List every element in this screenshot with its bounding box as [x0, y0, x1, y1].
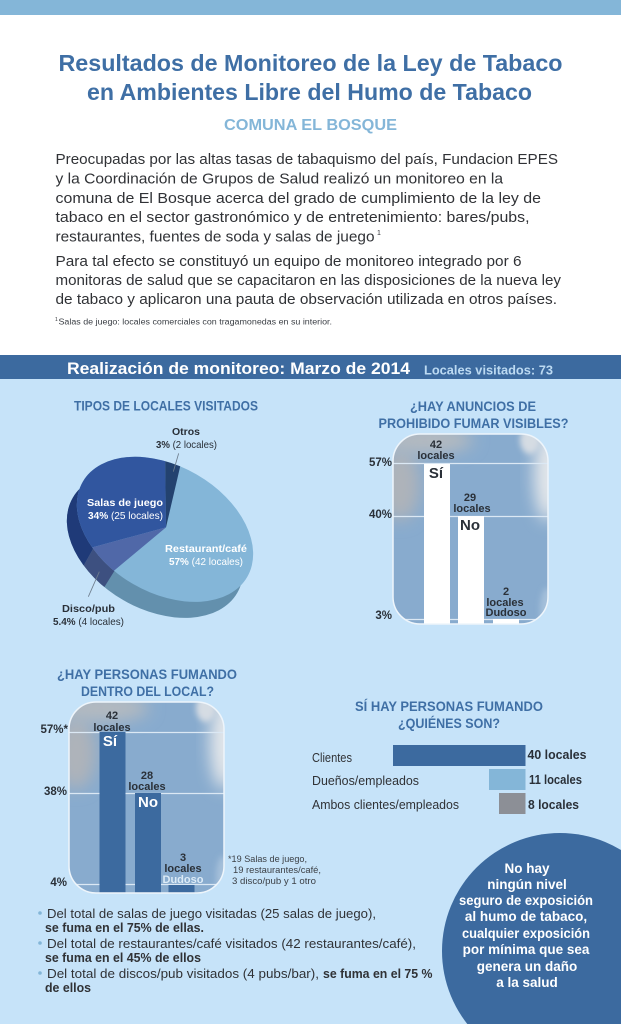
bar labels: 3	[180, 852, 186, 864]
callout circle: cualquier exposición	[462, 926, 590, 941]
panel: light blue background	[0, 355, 621, 1024]
bar chart: quienes son: Dueños/empleados	[312, 773, 419, 788]
bar labels: Dudoso	[163, 874, 204, 886]
title	[58, 50, 562, 105]
bar labels: 29	[464, 492, 476, 504]
intro text: monitoras de salud que se capacitaron en las disposiciones de la nueva ley	[56, 273, 562, 289]
bar labels: locales	[417, 450, 455, 462]
heading: anuncios	[378, 399, 568, 431]
callout circle: No hay	[504, 861, 550, 876]
intro text: 1	[377, 230, 381, 237]
bar labels	[93, 710, 204, 886]
bar chart: quienes son: 8 locales	[528, 798, 579, 812]
bar chart: quienes son: 40 locales	[528, 748, 587, 762]
label: salas de juego	[87, 497, 163, 522]
callout circle: a la salud	[496, 975, 558, 990]
intro text: restaurantes, fuentes de soda y salas de juego	[56, 230, 374, 246]
bar labels: locales	[164, 863, 202, 875]
heading: tipos de locales: TIPOS DE LOCALES VISITADOS	[74, 398, 258, 414]
banner: Realización de monitoreo: Marzo de 2014	[67, 359, 411, 378]
bullet list: de ellos	[45, 980, 91, 995]
axis labels	[369, 457, 392, 622]
heading: personas fumando: DENTRO DEL LOCAL?	[81, 684, 214, 699]
bullet list: Del total de restaurantes/café visitados (42 restaurantes/café),	[47, 936, 416, 951]
title: en Ambientes Libre del Humo de Tabaco	[87, 79, 532, 105]
chart footnote: *19 Salas de juego,	[228, 854, 307, 865]
intro text: comuna de El Bosque acerca del grado de cumplimiento de la ley de	[56, 191, 541, 207]
callout circle	[442, 833, 621, 1024]
bar labels: locales	[486, 597, 524, 609]
pie chart: tipos de locales	[53, 428, 254, 627]
chart footnote: 19 restaurantes/café,	[233, 865, 321, 876]
bar chart: quienes son: Ambos clientes/empleados	[312, 797, 459, 812]
axis labels: 38%	[44, 786, 67, 798]
bar labels: Sí	[429, 465, 444, 482]
sky background	[70, 702, 224, 892]
top band	[0, 0, 621, 15]
bullet list: se fuma en el 75% de ellas.	[45, 920, 204, 935]
footnote: Salas de juego: locales comerciales con tragamonedas en su interior.	[58, 318, 332, 326]
bar labels: 42	[106, 710, 118, 722]
chart footnote	[228, 854, 321, 887]
bullet list: se fuma en el 45% de ellos	[45, 950, 201, 965]
axis labels: 57%	[369, 457, 392, 469]
axis labels: 4%	[50, 877, 67, 889]
bar labels	[417, 439, 527, 619]
bar labels: locales	[93, 722, 131, 734]
label: salas de juego: Salas de juego	[87, 497, 163, 509]
bar labels: 28	[141, 770, 153, 782]
bullet list: se fuma en el 75 %	[323, 966, 433, 981]
bar chart: quienes son: Clientes	[312, 750, 352, 765]
bar labels: locales	[453, 503, 491, 515]
heading: quienes son: SÍ HAY PERSONAS FUMANDO	[355, 699, 543, 714]
heading: anuncios: ¿HAY ANUNCIOS DE	[410, 399, 536, 414]
bullet list	[38, 906, 433, 995]
label: disco: 5.4% (4 locales)	[53, 616, 124, 628]
axis labels: 40%	[369, 509, 392, 521]
bullet list: Del total de discos/pub visitados (4 pubs/bar),	[47, 966, 319, 981]
callout circle: genera un daño	[477, 959, 577, 974]
heading: anuncios: PROHIBIDO FUMAR VISIBLES?	[378, 416, 568, 431]
bar labels: 42	[430, 439, 442, 451]
axis labels	[40, 724, 69, 889]
intro text: Preocupadas por las altas tasas de tabaquismo del país, Fundacion EPES	[56, 152, 558, 168]
label: disco: Disco/pub	[62, 603, 115, 615]
label: otros	[156, 426, 217, 451]
label: salas de juego: 34% (25 locales)	[88, 510, 163, 522]
label: otros: Otros	[172, 426, 200, 438]
heading: quienes son	[355, 699, 543, 731]
banner	[0, 355, 621, 379]
sky background	[394, 434, 548, 624]
heading: personas fumando: ¿HAY PERSONAS FUMANDO	[57, 667, 237, 682]
bar labels: Sí	[103, 733, 118, 750]
heading: personas fumando	[57, 667, 237, 699]
bar labels: Dudoso	[486, 607, 527, 619]
intro text	[56, 152, 562, 308]
intro text: de tabaco y aplicaron una pauta de observación utilizada en otros países.	[56, 292, 557, 308]
callout circle: seguro de exposición	[459, 893, 593, 908]
chart footnote: 3 disco/pub y 1 otro	[232, 876, 316, 887]
label: disco	[53, 603, 124, 628]
intro text: Para tal efecto se constituyó un equipo de monitoreo integrado por 6	[56, 254, 522, 270]
label: otros: 3% (2 locales)	[156, 439, 217, 451]
title: Resultados de Monitoreo de la Ley de Tabaco	[58, 50, 562, 76]
bar labels: No	[460, 517, 480, 534]
intro text: y la Coordinación de Grupos de Salud realizó un monitoreo en la	[56, 172, 504, 188]
axis labels: 3%	[375, 610, 392, 622]
intro text: tabaco en el sector gastronómico y de entretenimiento: bares/pubs,	[56, 210, 530, 226]
label: restaurant: Restaurant/café	[165, 543, 247, 555]
heading: quienes son: ¿QUIÉNES SON?	[398, 716, 500, 731]
subtitle: COMUNA EL BOSQUE	[224, 117, 397, 134]
bar labels: 2	[503, 586, 509, 598]
bar labels: No	[138, 794, 158, 811]
label: restaurant: 57% (42 locales)	[169, 556, 243, 568]
bullet list: Del total de salas de juego visitadas (25 salas de juego),	[47, 906, 376, 921]
axis labels: 57%*	[40, 724, 69, 736]
bar chart: quienes son: 11 locales	[529, 773, 582, 787]
label: restaurant	[165, 543, 247, 568]
bar chart: quienes son	[312, 745, 587, 814]
callout circle: ningún nivel	[487, 877, 567, 892]
footnote: 1	[55, 317, 58, 323]
banner: Locales visitados: 73	[424, 364, 553, 378]
bar chart: anuncios	[369, 433, 549, 625]
callout circle: al humo de tabaco,	[465, 909, 587, 924]
bar labels: locales	[128, 781, 166, 793]
bar chart: personas fumando	[40, 701, 225, 894]
callout circle: por mínima que sea	[463, 942, 590, 957]
